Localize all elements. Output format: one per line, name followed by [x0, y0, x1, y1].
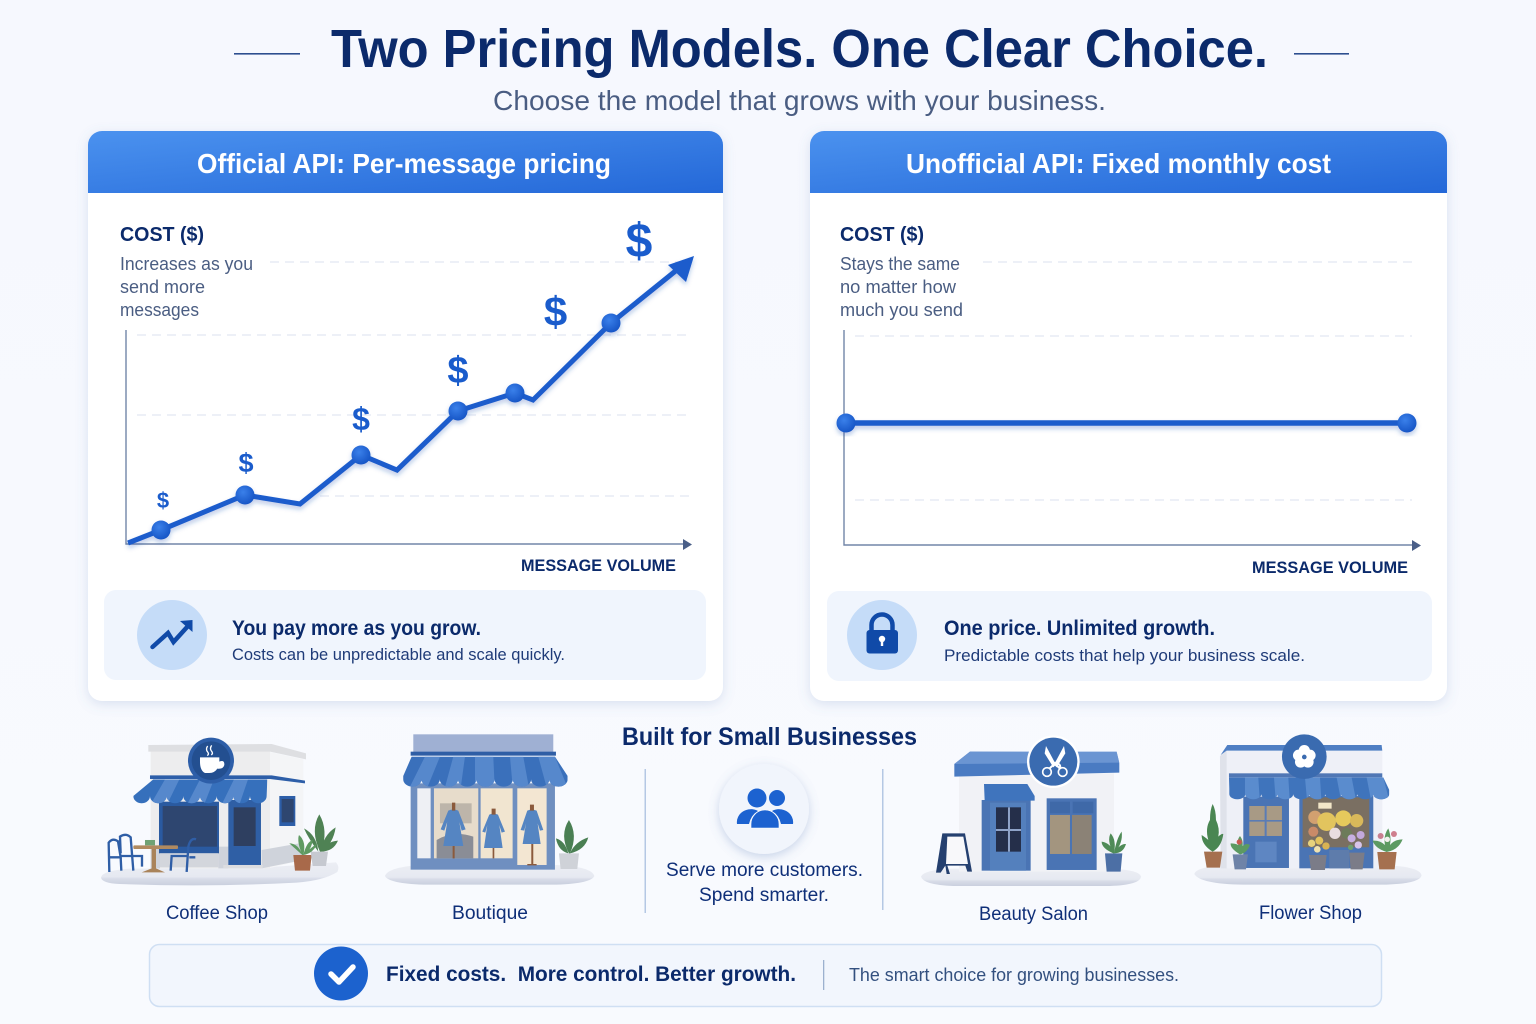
- y-axis label: COST ($): [840, 224, 924, 246]
- panel header: official: Official API: Per-message pricing: [197, 148, 611, 179]
- title: Two Pricing Models. One Clear Choice.: [331, 19, 1268, 79]
- line chart: rising cost: $: [157, 488, 169, 513]
- icon: lock: [847, 600, 917, 670]
- callout: pay more: Costs can be unpredictable and scale quickly.: [232, 645, 565, 664]
- illustration: beauty salon: [921, 735, 1141, 886]
- central feature: serve more customers: Spend smarter.: [699, 885, 829, 906]
- line chart: rising cost: [126, 215, 694, 550]
- label: flower shop: Flower Shop: [1259, 903, 1362, 924]
- bottom banner: [150, 944, 1382, 1006]
- line chart: rising cost: $: [352, 401, 370, 437]
- icon: check: [314, 946, 368, 1000]
- x-axis label: MESSAGE VOLUME: [1252, 559, 1408, 577]
- label: beauty salon: Beauty Salon: [979, 904, 1088, 925]
- central feature: serve more customers: [644, 764, 884, 913]
- line chart: rising cost: $: [544, 288, 567, 335]
- callout: one price: Predictable costs that help your business scale.: [944, 646, 1305, 665]
- x-axis label: MESSAGE VOLUME: [521, 557, 676, 575]
- illustration: flower shop: [1194, 734, 1422, 885]
- panel header: unofficial: Unofficial API: Fixed monthly cost: [906, 148, 1331, 179]
- callout: pay more: You pay more as you grow.: [232, 617, 481, 640]
- bottom banner: Fixed costs. More control. Better growth.: [386, 963, 796, 986]
- subtitle: Choose the model that grows with your business.: [493, 85, 1106, 116]
- central feature: serve more customers: Serve more customers.: [666, 860, 863, 881]
- bottom banner: The smart choice for growing businesses.: [849, 965, 1179, 985]
- description: messages: [120, 300, 199, 320]
- description: no matter how: [840, 277, 957, 297]
- line chart: flat cost: [836, 262, 1421, 551]
- description: send more: [120, 277, 205, 297]
- label: boutique: Boutique: [452, 903, 528, 924]
- icon: trend up: [137, 600, 207, 670]
- illustration: boutique: [385, 734, 594, 885]
- description: Increases as you: [120, 254, 253, 274]
- y-axis label: COST ($): [120, 224, 204, 246]
- description: Stays the same: [840, 254, 960, 274]
- section heading: Built for Small Businesses: [622, 723, 917, 751]
- panel header: unofficial: [810, 131, 1447, 193]
- description: [840, 254, 963, 320]
- line chart: rising cost: $: [626, 215, 653, 268]
- callout: pay more: [104, 590, 706, 680]
- panel header: official: [88, 131, 723, 193]
- panel: unofficial API: [810, 131, 1447, 701]
- line chart: rising cost: $: [447, 350, 469, 392]
- line chart: rising cost: $: [238, 448, 254, 478]
- illustration: coffee shop: [101, 738, 338, 885]
- label: coffee shop: Coffee Shop: [166, 903, 268, 924]
- panel: official API: [88, 131, 723, 701]
- description: [120, 254, 253, 320]
- callout: one price: One price. Unlimited growth.: [944, 617, 1215, 640]
- description: much you send: [840, 300, 963, 320]
- icon: people: [737, 788, 793, 828]
- callout: one price: [827, 591, 1432, 681]
